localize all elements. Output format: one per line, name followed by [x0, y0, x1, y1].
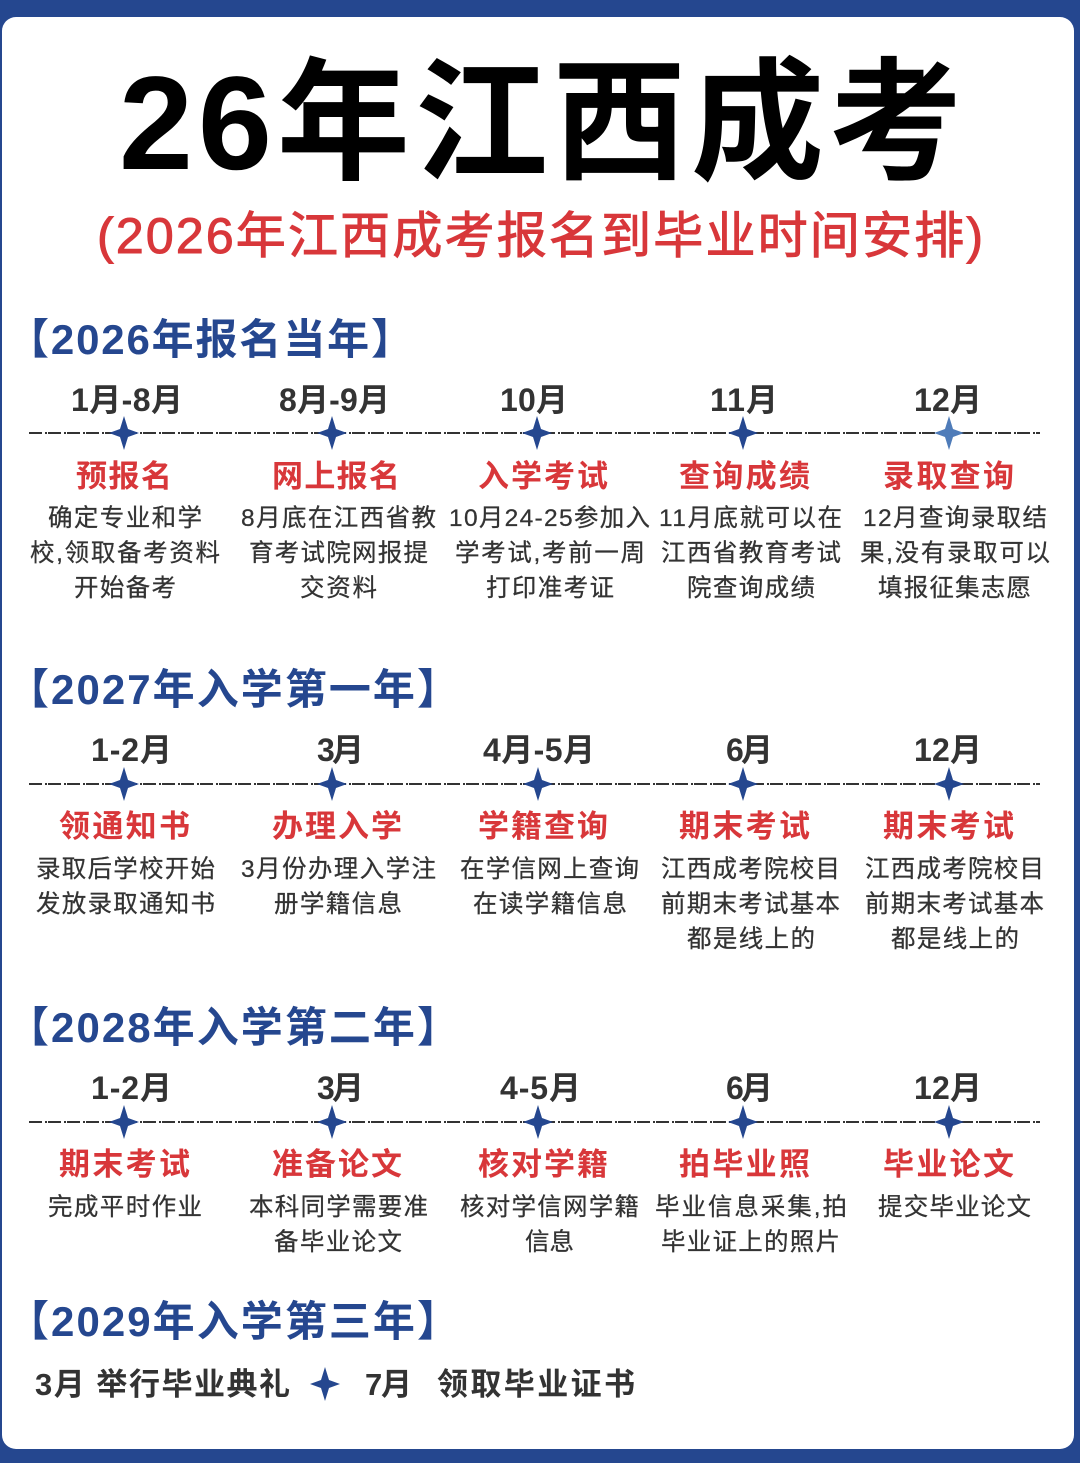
milestone: graduation ceremony: 3月 举行毕业典礼 — [35, 1367, 290, 1402]
step: 毕业论文 — [878, 1070, 1031, 1221]
step: 入学考试: 学考试,考前一周 — [455, 539, 645, 567]
title: 26年江西成考 — [119, 50, 962, 198]
step: 录取查询: 果,没有录取可以 — [860, 539, 1050, 567]
step: 查询成绩: 院查询成绩 — [687, 574, 815, 602]
step: 期末考试 12月: 前期末考试基本 — [865, 890, 1044, 918]
step: 学籍查询: 4月-5月 — [483, 732, 595, 768]
step: 期末考试: 期末考试 — [59, 1147, 190, 1182]
step: 期末考试: 期末考试 — [679, 809, 810, 844]
step: 预报名: 1月-8月 — [71, 382, 183, 418]
step: 办理入学: 办理入学 — [272, 809, 402, 844]
step: 期末考试 — [48, 1070, 202, 1221]
milestone: 7月: 7月 — [365, 1367, 412, 1402]
step: 准备论文: 备毕业论文 — [274, 1228, 402, 1256]
step: 查询成绩 — [659, 382, 842, 602]
panel: 2028 second year — [7, 1004, 1040, 1256]
step: 学籍查询: 学籍查询 — [478, 809, 608, 844]
step: 领通知书: 1-2月 — [91, 732, 172, 768]
step: 网上报名 — [241, 382, 436, 602]
step: 期末考试 12月 — [865, 732, 1044, 953]
step: 领通知书: 发放录取通知书 — [36, 890, 215, 918]
step: 准备论文: 本科同学需要准 — [249, 1193, 428, 1221]
step: 期末考试 12月: 江西成考院校目 — [865, 855, 1044, 883]
step: 入学考试: 打印准考证 — [486, 574, 614, 602]
step: 预报名 — [30, 382, 220, 602]
step: 录取查询 — [860, 382, 1050, 602]
step: 领通知书: 录取后学校开始 — [36, 855, 215, 883]
subtitle: (2026年江西成考报名到毕业时间安排) — [97, 208, 983, 264]
step: 核对学籍: 信息 — [525, 1228, 574, 1256]
step: 期末考试: 前期末考试基本 — [661, 890, 840, 918]
panel: 2026 application year — [7, 316, 1050, 602]
step: 查询成绩: 11月 — [710, 382, 778, 418]
step: 查询成绩: 江西省教育考试 — [661, 539, 841, 567]
milestone: collect certificate: 领取毕业证书 — [437, 1367, 635, 1402]
step: 毕业论文: 提交毕业论文 — [878, 1193, 1031, 1221]
step: 学籍查询: 在学信网上查询 — [460, 855, 639, 883]
step: 期末考试 12月: 12月 — [914, 732, 982, 768]
step: 期末考试 — [661, 732, 840, 953]
step: 核对学籍: 核对学籍 — [478, 1147, 608, 1182]
step: 毕业论文: 毕业论文 — [883, 1147, 1014, 1182]
heading: 2028: 【2028年入学第二年】 — [7, 1004, 459, 1051]
step: 入学考试: 10月 — [500, 382, 568, 418]
step: 录取查询: 12月 — [914, 382, 982, 418]
heading: 2026: 【2026年报名当年】 — [7, 316, 413, 363]
step: 录取查询: 录取查询 — [883, 459, 1014, 494]
step: 准备论文 — [249, 1070, 428, 1256]
step: 核对学籍 — [460, 1070, 639, 1256]
step: 办理入学 — [241, 732, 436, 918]
step: 期末考试 12月: 都是线上的 — [891, 925, 1019, 953]
step: 期末考试 12月: 期末考试 — [883, 809, 1014, 844]
timeline: 2028 — [29, 1105, 1040, 1139]
step: 期末考试: 都是线上的 — [687, 925, 815, 953]
step: 办理入学: 3月 — [317, 732, 364, 768]
heading: 2029: 【2029年入学第三年】 — [7, 1298, 459, 1345]
step: 领通知书: 领通知书 — [59, 809, 190, 844]
step: 办理入学: 册学籍信息 — [274, 890, 402, 918]
step: 拍毕业照: 毕业证上的照片 — [661, 1228, 840, 1256]
step: 入学考试 — [449, 382, 650, 602]
step: 网上报名: 网上报名 — [272, 459, 400, 494]
step: 办理入学: 3月份办理入学注 — [241, 855, 436, 883]
step: 拍毕业照 — [655, 1070, 847, 1256]
timeline: 2027 — [29, 767, 1040, 801]
timeline: 2026 — [29, 416, 1040, 450]
step: 网上报名: 交资料 — [300, 574, 377, 602]
step: 网上报名: 8月-9月 — [279, 382, 390, 418]
step: 学籍查询: 在读学籍信息 — [473, 890, 627, 918]
step: 预报名: 确定专业和学 — [48, 504, 202, 532]
step: 查询成绩: 查询成绩 — [679, 459, 810, 494]
step: 期末考试: 江西成考院校目 — [661, 855, 840, 883]
icon: star — [310, 1367, 340, 1401]
step: 预报名: 校,领取备考资料 — [30, 539, 220, 567]
step: 网上报名: 8月底在江西省教 — [241, 504, 436, 532]
step: 毕业论文: 12月 — [914, 1070, 982, 1106]
step: 入学考试: 10月24-25参加入 — [449, 504, 650, 532]
step: 拍毕业照: 6月 — [726, 1070, 773, 1106]
step: 领通知书 — [36, 732, 215, 918]
step: 期末考试: 完成平时作业 — [48, 1193, 202, 1221]
panel: 2027 first year — [7, 666, 1044, 953]
step: 入学考试: 入学考试 — [478, 459, 608, 494]
step: 拍毕业照: 毕业信息采集,拍 — [655, 1193, 847, 1221]
heading: 2027: 【2027年入学第一年】 — [7, 666, 459, 713]
step: 学籍查询 — [460, 732, 639, 918]
step: 期末考试: 6月 — [726, 732, 773, 768]
step: 期末考试: 1-2月 — [91, 1070, 172, 1106]
step: 拍毕业照: 拍毕业照 — [679, 1147, 810, 1182]
step: 查询成绩: 11月底就可以在 — [659, 504, 842, 532]
step: 网上报名: 育考试院网报提 — [249, 539, 428, 567]
step: 预报名: 开始备考 — [74, 574, 176, 602]
step: 录取查询: 12月查询录取结 — [863, 504, 1047, 532]
step: 准备论文: 3月 — [317, 1070, 364, 1106]
step: 核对学籍: 4-5月 — [500, 1070, 581, 1106]
step: 准备论文: 准备论文 — [272, 1147, 402, 1182]
step: 预报名: 预报名 — [76, 459, 172, 494]
step: 录取查询: 填报征集志愿 — [878, 574, 1031, 602]
step: 核对学籍: 核对学信网学籍 — [460, 1193, 639, 1221]
panel: 2029 third year — [7, 1298, 635, 1402]
